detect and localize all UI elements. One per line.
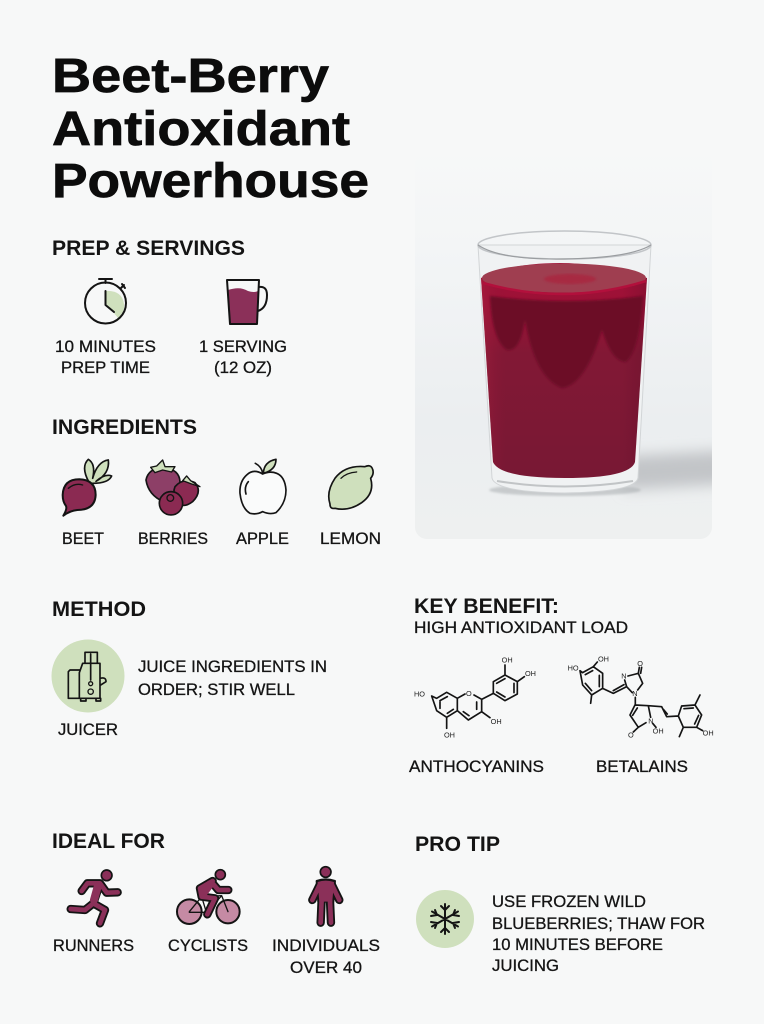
- chart: betalain molecule: [568, 654, 714, 739]
- chart: anthocyanin molecule: OH: [525, 669, 536, 678]
- label: apple: APPLE: [236, 529, 289, 548]
- label: lemon: LEMON: [320, 529, 381, 548]
- chart: betalain molecule: HO: [568, 664, 579, 673]
- chart: betalain molecule: N: [632, 689, 638, 698]
- label: berries: BERRIES: [138, 529, 208, 548]
- chart: anthocyanin molecule: OH: [502, 656, 513, 665]
- chart: betalain molecule: O: [628, 730, 634, 739]
- glass shadow: [625, 450, 730, 490]
- icon: runner: [71, 870, 118, 923]
- label: individuals over 40: OVER 40: [290, 958, 362, 977]
- heading: ingredients: INGREDIENTS: [52, 416, 197, 439]
- text: method instruction: [138, 657, 327, 699]
- glass base: [497, 481, 633, 486]
- icon: person: [312, 867, 339, 923]
- dark reflection on juice: [490, 296, 643, 388]
- label: 1 serving 12 oz: 1 SERVING: [199, 337, 287, 356]
- icon: lemon: [329, 466, 373, 509]
- section: ingredients: [52, 416, 381, 548]
- chart: anthocyanin molecule: HO: [414, 690, 425, 699]
- text: method instruction: ORDER; STIR WELL: [138, 680, 295, 699]
- icon: snowflake: [416, 890, 474, 948]
- heading: key benefit: KEY BENEFIT:: [414, 595, 559, 618]
- chart: betalain molecule: N: [648, 716, 654, 725]
- label: individuals over 40: INDIVIDUALS: [272, 936, 380, 955]
- text: pro tip: BLUEBERRIES; THAW FOR: [492, 914, 705, 933]
- glass rim: [478, 231, 651, 259]
- title: [52, 50, 369, 208]
- heading: pro tip: PRO TIP: [415, 833, 500, 856]
- label: 10 minutes prep time: [55, 337, 156, 377]
- icon: berries: [146, 460, 200, 515]
- section: pro tip: [415, 833, 705, 975]
- chart: betalain molecule: OH: [703, 728, 714, 737]
- label: 10 minutes prep time: 10 MINUTES: [55, 337, 156, 356]
- chart: betalain molecule: OH: [653, 726, 664, 735]
- label: 1 serving 12 oz: (12 OZ): [214, 358, 272, 377]
- section: method: [52, 598, 327, 739]
- icon: stopwatch: [85, 279, 126, 324]
- chart: betalain molecule: N: [621, 672, 627, 681]
- section: prep and servings: [52, 237, 287, 377]
- text: pro tip: USE FROZEN WILD: [492, 892, 646, 911]
- icon: apple: [240, 459, 286, 514]
- icon: juicer: [52, 640, 124, 712]
- juice surface: [482, 264, 646, 292]
- chart: anthocyanin molecule: [414, 656, 536, 739]
- text: pro tip: JUICING: [492, 956, 559, 975]
- section: ideal for: [52, 830, 380, 977]
- label: 1 serving 12 oz: [199, 337, 287, 377]
- label: individuals over 40: [272, 936, 380, 977]
- chart: anthocyanin molecule: OH: [444, 730, 455, 739]
- glass contact shadow: [489, 484, 641, 496]
- label: runners: RUNNERS: [53, 936, 134, 955]
- heading: method: METHOD: [52, 598, 146, 621]
- icon: beet: [63, 459, 112, 516]
- heading: ideal for: IDEAL FOR: [52, 830, 165, 853]
- label: anthocyanins: ANTHOCYANINS: [409, 757, 544, 776]
- title: Powerhouse: [52, 155, 369, 208]
- chart: anthocyanin molecule: O: [466, 689, 472, 698]
- chart: betalain molecule: O: [637, 659, 643, 668]
- label: 10 minutes prep time: PREP TIME: [61, 358, 150, 377]
- text: method instruction: JUICE INGREDIENTS IN: [138, 657, 327, 676]
- chart: anthocyanin molecule: OH: [491, 717, 502, 726]
- juice: [481, 263, 647, 478]
- title: Beet-Berry: [52, 50, 329, 103]
- icon: cyclist: [177, 870, 240, 924]
- label: betalains: BETALAINS: [596, 757, 688, 776]
- glass body: [478, 245, 651, 493]
- title: Antioxidant: [52, 103, 350, 156]
- text: pro tip: [492, 892, 705, 975]
- icon: mug of juice: [227, 280, 267, 324]
- label: cyclists: CYCLISTS: [168, 936, 248, 955]
- text: pro tip: 10 MINUTES BEFORE: [492, 935, 663, 954]
- panel: juice photo: [415, 230, 712, 539]
- subheading: high antioxidant load: HIGH ANTIOXIDANT LOAD: [414, 618, 628, 637]
- heading: prep and servings: PREP & SERVINGS: [52, 237, 245, 260]
- chart: betalain molecule: OH: [598, 654, 609, 663]
- section: key benefit: [409, 595, 714, 776]
- label: beet: BEET: [62, 529, 104, 548]
- label: juicer: JUICER: [58, 720, 118, 739]
